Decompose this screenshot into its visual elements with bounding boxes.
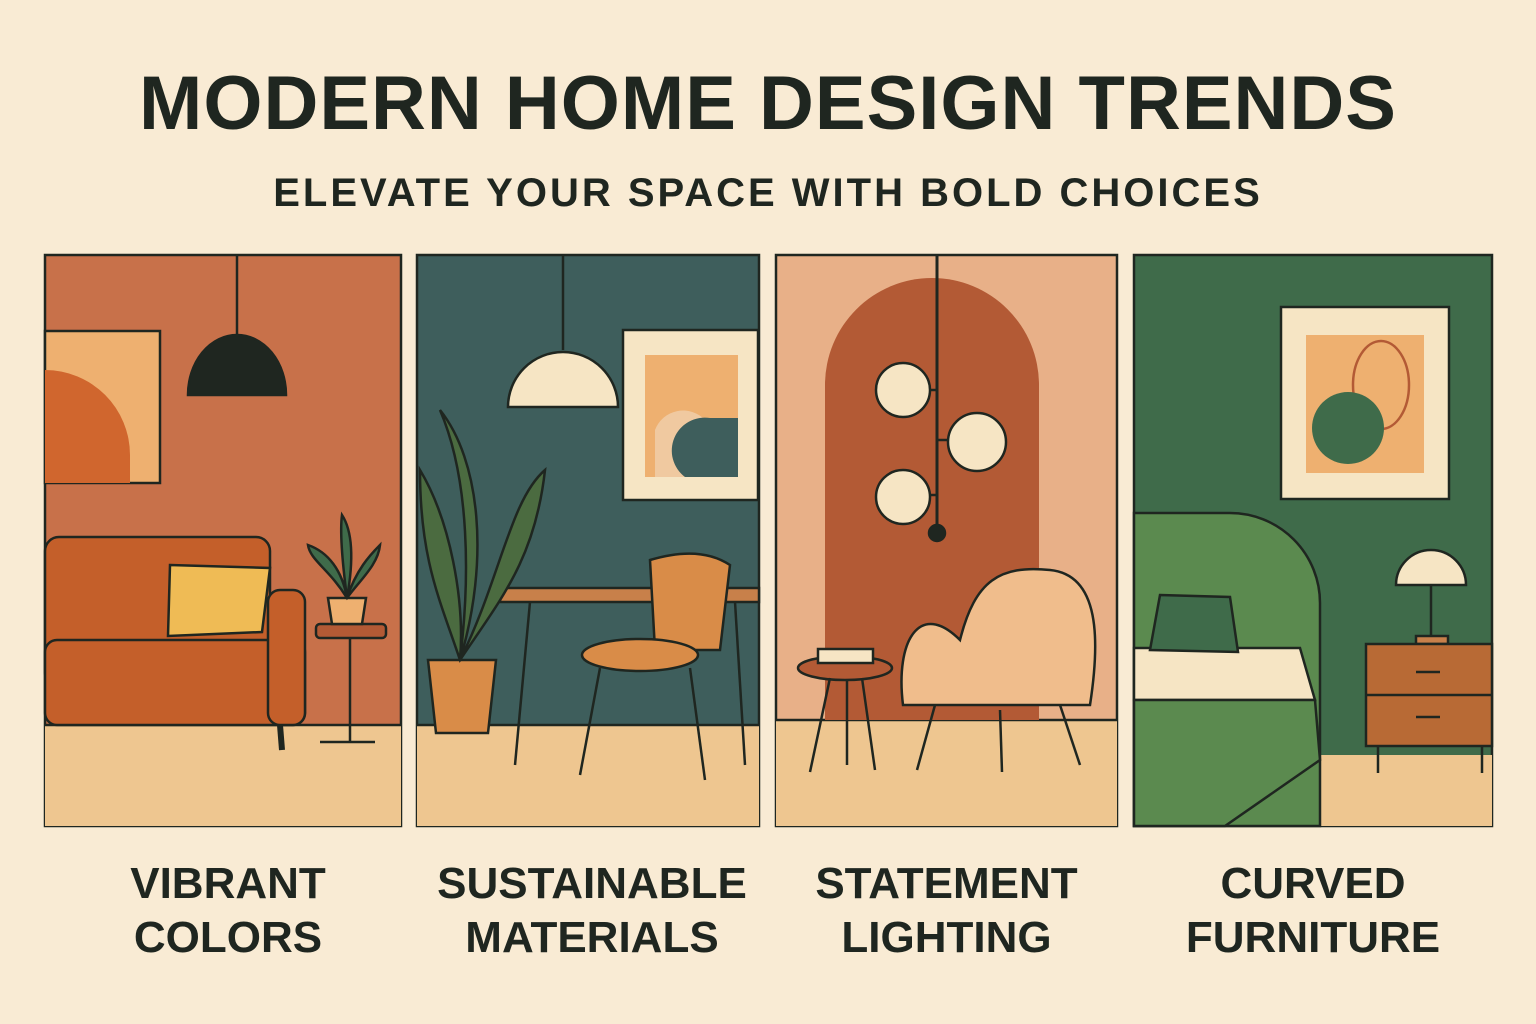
- label: vibrant colors: [130, 859, 326, 962]
- label: sustainable materials: SUSTAINABLE: [437, 859, 747, 908]
- label: statement lighting: [815, 859, 1078, 962]
- label: sustainable materials: [437, 859, 747, 962]
- subtitle: ELEVATE YOUR SPACE WITH BOLD CHOICES: [273, 171, 1263, 215]
- label: curved furniture: FURNITURE: [1186, 913, 1440, 962]
- label: sustainable materials: MATERIALS: [465, 913, 719, 962]
- panel: vibrant colors: [45, 255, 401, 826]
- label: vibrant colors: COLORS: [134, 913, 322, 962]
- label: vibrant colors: VIBRANT: [130, 859, 326, 908]
- title: MODERN HOME DESIGN TRENDS: [139, 61, 1397, 146]
- label: curved furniture: CURVED: [1220, 859, 1406, 908]
- label: statement lighting: LIGHTING: [841, 913, 1052, 962]
- panel: statement lighting: [776, 255, 1117, 826]
- panel: curved furniture: [1134, 255, 1492, 826]
- panel: sustainable materials: [417, 255, 759, 826]
- label: statement lighting: STATEMENT: [815, 859, 1078, 908]
- label: curved furniture: [1186, 859, 1440, 962]
